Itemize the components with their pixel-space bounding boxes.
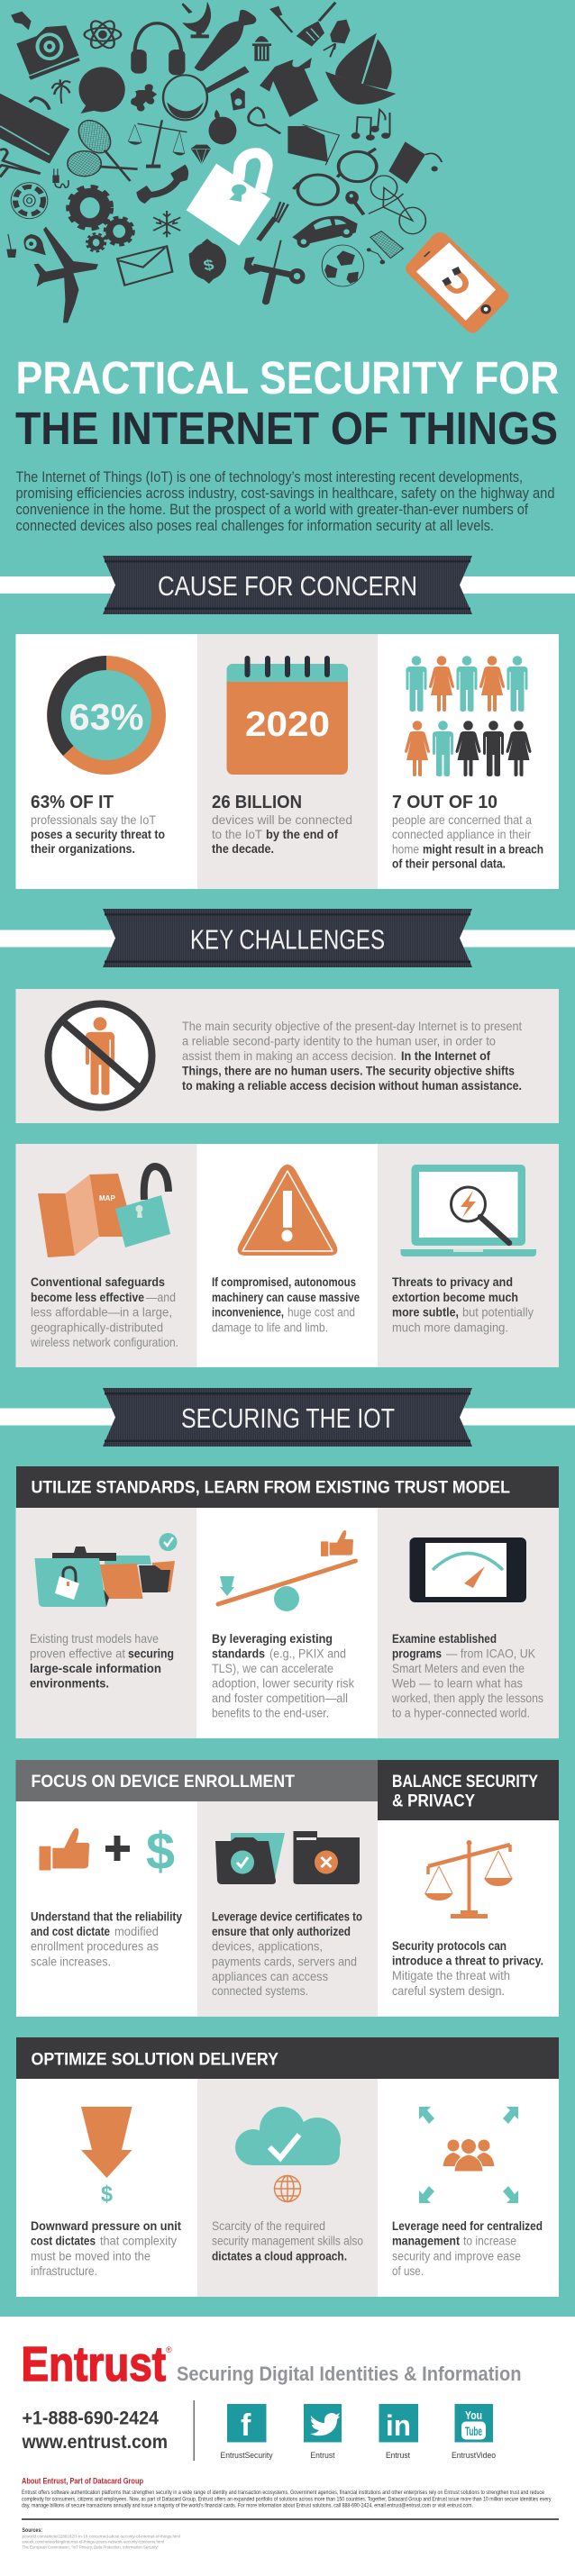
- text: autonomous machinery: machinery can cause massive: [212, 1290, 360, 1304]
- icon: speech bubble: [78, 67, 125, 113]
- text: threats to privacy: much more damaging.: [392, 1320, 508, 1335]
- icon: oil can: [388, 141, 442, 184]
- text: examine established programs: [391, 1631, 543, 1720]
- text: scarcity of skills: security management skills also: [212, 2234, 363, 2248]
- icon: shovel: [6, 234, 16, 258]
- icon: hanger: [0, 150, 41, 177]
- header: focus on device enrollment: [16, 1760, 378, 1801]
- panel: optimize solution delivery: [16, 2037, 559, 2297]
- text: conventional safeguards: become less effective: [31, 1290, 144, 1304]
- text: 7 out of 10: people are concerned that a: [392, 812, 532, 827]
- about text block: day, manage billions of secure transactions annually and issue a majority of the world’s financial cards. For more information about Entrust solutions, call 888-690-2424, email entrust@entrust.com or visit entrust.com.: [22, 2502, 473, 2509]
- text: existing trust models: securing: [128, 1646, 174, 1661]
- icon: seesaw with thumb up: [218, 1530, 355, 1611]
- text: conventional safeguards: [30, 1274, 178, 1349]
- icon: satellite dish: [181, 2, 211, 38]
- about text block: [22, 2477, 552, 2509]
- icon: calendar 2020: 2020: [245, 705, 330, 744]
- icon: no person sign: [49, 1003, 151, 1108]
- text: security objective: The main security objective of the present-day Internet is to present: [182, 1019, 522, 1033]
- header: balance security and privacy: [378, 1760, 559, 1820]
- icon: dress form: [324, 20, 351, 57]
- icon: apple: [209, 110, 236, 144]
- text: conventional safeguards: Conventional safeguards: [31, 1274, 165, 1289]
- icon: envelope: [117, 246, 172, 286]
- text: leveraging existing standards: benefits to the end-user.: [212, 1706, 329, 1720]
- social icon: Facebook: f: [241, 2408, 251, 2443]
- icon: white padlock: [187, 153, 270, 246]
- text: existing trust models: environments.: [30, 1675, 109, 1690]
- icon: camera: [16, 25, 80, 80]
- social icon: LinkedIn: Entrust: [386, 2451, 410, 2461]
- text: device certificates: devices, applications,: [212, 1938, 323, 1953]
- text: security objective: In the Internet of: [401, 1048, 490, 1063]
- social icon: Twitter: [304, 2404, 342, 2461]
- text: centralized management: Leverage need for centralized: [392, 2218, 543, 2233]
- text: 7 out of 10: of their personal data.: [392, 856, 506, 870]
- social icon: YouTube: Tube: [465, 2424, 482, 2438]
- icon: key: [345, 191, 364, 214]
- icon: t-shirt: [260, 58, 318, 117]
- section banner: cause for concern: CAUSE FOR CONCERN: [158, 570, 417, 602]
- text: security objective: a reliable second-party identity to the human user, in order to: [182, 1034, 496, 1048]
- icon: wrench and screwdriver: [244, 240, 306, 302]
- text: 63% of IT: poses a security threat to: [31, 827, 165, 841]
- icon: downward arrow and dollar: [81, 2107, 132, 2207]
- text: 7 out of 10: 7 OUT OF 10: [392, 793, 497, 812]
- text: scarcity of skills: Scarcity of the required: [212, 2218, 325, 2233]
- text: 26 billion: 26 BILLION: [212, 793, 302, 812]
- icon: piggy bank: [189, 239, 226, 284]
- text: centralized management: of use.: [392, 2263, 424, 2278]
- icon: scales: [128, 120, 187, 168]
- icon: downward arrow and dollar: $: [101, 2181, 113, 2207]
- text: autonomous machinery: [212, 1274, 360, 1335]
- contact details: +1-888-690-2424: [22, 2408, 159, 2428]
- text: 26 billion: the decade.: [212, 841, 274, 856]
- donut chart: 63%: 63%: [68, 696, 144, 738]
- icon: telephone handset: [136, 165, 188, 204]
- text: reliability and cost: enrollment procedures as: [31, 1938, 159, 1953]
- text: 26 billion: to the IoT: [212, 827, 262, 841]
- icon: thumb plus dollar: $: [146, 1822, 175, 1881]
- intro paragraph: connected devices also poses real challenges for information security at all levels.: [16, 517, 494, 534]
- icon: gears: [68, 186, 133, 251]
- social icon: YouTube: You: [465, 2408, 482, 2422]
- about text block: About Entrust, Part of Datacard Group: [22, 2477, 143, 2486]
- icon: atom: [85, 18, 121, 50]
- text: downward pressure: must be moved into the: [31, 2248, 151, 2263]
- section banner: securing the IoT: SECURING THE IOT: [181, 1402, 395, 1434]
- icon: music notes: [351, 110, 390, 141]
- icon: laptop with magnifier: [400, 1165, 536, 1256]
- text: conventional safeguards: —and: [146, 1290, 176, 1304]
- section banner: securing the IoT: [0, 1388, 575, 1447]
- icon: piggy bank: $: [202, 256, 216, 274]
- icon: milk carton: [231, 87, 245, 111]
- icon: sailboat: [325, 33, 396, 104]
- icon: calendar 2020: [227, 656, 348, 775]
- sources: Sources:: [22, 2527, 42, 2534]
- text: centralized management: management: [392, 2234, 460, 2248]
- panel: utilize standards: [16, 1466, 559, 1738]
- text: leveraging existing standards: (e.g., PKIX and: [269, 1646, 346, 1661]
- text: examine established programs: to a hyper-connected world.: [392, 1706, 530, 1720]
- icon: people row, 7 of 10: [405, 656, 532, 776]
- text: leveraging existing standards: standards: [212, 1646, 265, 1661]
- text: security objective: [182, 1019, 522, 1093]
- icon: soccer ball: [322, 245, 364, 286]
- text: security protocols: Mitigate the threat with: [392, 1968, 510, 1982]
- text: security protocols: [392, 1938, 543, 1998]
- icon: glasses: [293, 149, 377, 204]
- icon: folder: [288, 124, 339, 165]
- social icon: LinkedIn: in: [386, 2409, 411, 2442]
- text: threats to privacy: extortion become much: [392, 1290, 518, 1304]
- contact details: www.entrust.com: [22, 2432, 168, 2453]
- sources: eweek.com/networking/internet-of-things-poses-network-security-concerns.html: [22, 2540, 164, 2545]
- icon: thumb plus dollar: [40, 1822, 175, 1881]
- panel: no human users: [16, 989, 559, 1123]
- icon: game controller: [11, 12, 32, 30]
- text: existing trust models: proven effective at: [30, 1646, 125, 1661]
- text: existing trust models: Existing trust models have: [30, 1631, 159, 1646]
- text: conventional safeguards: less affordable—in a large,: [31, 1304, 172, 1319]
- icon: briefcase: [0, 93, 69, 164]
- text: threats to privacy: [392, 1274, 534, 1335]
- text: threats to privacy: Threats to privacy and: [392, 1274, 513, 1289]
- panel: device enrollment and balance: [16, 1760, 559, 2017]
- text: existing trust models: large-scale information: [30, 1661, 161, 1675]
- sources: [22, 2527, 180, 2551]
- icon: certificate folders: [215, 1831, 360, 1884]
- section header: UTILIZE STANDARDS, LEARN FROM EXISTING TRUST MODEL: [31, 1479, 510, 1497]
- icon: plug: [53, 168, 68, 187]
- text: downward pressure: cost dictates: [31, 2234, 96, 2248]
- section banner: key challenges: KEY CHALLENGES: [190, 924, 385, 955]
- contact details: [22, 2408, 168, 2453]
- text: conventional safeguards: geographically-distributed: [31, 1320, 163, 1335]
- social icon: Twitter: Entrust: [310, 2451, 335, 2461]
- icon: magnifier: [163, 66, 250, 120]
- text: device certificates: [212, 1909, 362, 1998]
- icon: orange smartphone with magnet: [406, 232, 509, 333]
- text: reliability and cost: and cost dictate: [31, 1924, 110, 1938]
- icon: car: [292, 216, 358, 248]
- icon: bicycle: [369, 176, 425, 234]
- icon: palm tree: [52, 79, 70, 104]
- text: security objective: assist them in making an access decision.: [182, 1048, 397, 1063]
- text: security protocols: Security protocols can: [392, 1938, 507, 1953]
- header: balance security and privacy: & PRIVACY: [392, 1792, 475, 1810]
- text: 26 billion: [212, 793, 352, 856]
- intro paragraph: [16, 468, 555, 534]
- social icon: YouTube: [452, 2404, 496, 2461]
- icon: spatula: [297, 3, 335, 47]
- icon: fork: [259, 202, 288, 240]
- text: examine established programs: Web — to learn what has: [392, 1675, 523, 1690]
- text: device certificates: payments cards, servers and: [212, 1955, 357, 1969]
- icon: cloud and globe: [235, 2107, 341, 2201]
- text: reliability and cost: modified: [114, 1924, 159, 1938]
- text: examine established programs: Examine established: [392, 1631, 497, 1646]
- icon: folders with lock and check: [34, 1533, 177, 1607]
- icon: warning triangle: [238, 1165, 337, 1256]
- text: 63% of IT: their organizations.: [31, 841, 135, 856]
- section header: OPTIMIZE SOLUTION DELIVERY: [31, 2050, 278, 2070]
- text: 26 billion: devices will be connected: [212, 812, 352, 827]
- social icon: LinkedIn: [379, 2404, 418, 2461]
- title: [15, 352, 559, 454]
- section header: [16, 2037, 559, 2079]
- text: 26 billion: by the end of: [266, 827, 338, 841]
- icon: diamond: [191, 145, 211, 165]
- text: examine established programs: worked, then apply the lessons: [391, 1691, 543, 1705]
- icon: tennis rackets: [68, 116, 138, 181]
- text: downward pressure: that complexity: [100, 2234, 177, 2248]
- icon: axe: [269, 6, 292, 32]
- text: examine established programs: Smart Meters and even the: [392, 1661, 525, 1675]
- logo: Entrust: Entrust: [22, 2337, 166, 2391]
- icon: bottle: [195, 10, 256, 71]
- text: device certificates: Leverage device certificates to: [212, 1909, 362, 1924]
- icon: puzzle piece: [131, 84, 157, 111]
- text: leveraging existing standards: adoption, lower security risk: [212, 1675, 355, 1690]
- panel: challenges row: [16, 1144, 559, 1367]
- section header: [16, 1466, 559, 1508]
- icon: balance scale: [424, 1840, 513, 1918]
- social icon: Facebook: EntrustSecurity: [220, 2451, 273, 2461]
- text: security objective: Things, there are no human users. The security objective shifts: [182, 1063, 515, 1077]
- text: 7 out of 10: home: [392, 841, 419, 856]
- header: focus on device enrollment: FOCUS ON DEVICE ENROLLMENT: [31, 1773, 295, 1791]
- text: scarcity of skills: [212, 2218, 363, 2263]
- text: security protocols: introduce a threat to privacy.: [392, 1953, 543, 1967]
- social icon: Facebook: [220, 2404, 273, 2461]
- text: reliability and cost: Understand that the reliability: [31, 1909, 182, 1924]
- hero icon cloud: [0, 2, 509, 333]
- text: reliability and cost: [31, 1909, 182, 1969]
- text: examine established programs: programs: [392, 1646, 442, 1661]
- text: device certificates: ensure that only authorized: [212, 1924, 351, 1938]
- text: device certificates: connected systems.: [212, 1983, 308, 1998]
- sources: pcworld.com/article/2288182/7-in-10-concerned-about-security-of-internet-of-things.html: [22, 2535, 180, 2540]
- icon: map pin: [23, 234, 46, 255]
- text: reliability and cost: scale increases.: [31, 1955, 111, 1969]
- header: balance security and privacy: BALANCE SECURITY: [392, 1773, 538, 1791]
- icon: map and open padlock: [38, 1166, 170, 1257]
- text: leveraging existing standards: TLS), we can accelerate: [212, 1661, 333, 1675]
- icon: compact disc: [11, 183, 48, 219]
- social icon: YouTube: EntrustVideo: [452, 2451, 496, 2461]
- panel: cause for concern: [16, 634, 559, 889]
- text: autonomous machinery: huge cost and: [288, 1304, 355, 1319]
- text: autonomous machinery: inconvenience,: [212, 1304, 284, 1319]
- logo: Entrust: ®: [166, 2345, 172, 2354]
- text: centralized management: security and improve ease: [392, 2248, 521, 2263]
- icon: shopping cart: [367, 231, 404, 264]
- text: 63% of IT: professionals say the IoT: [31, 812, 156, 827]
- icon: centralized people with arrows: [419, 2107, 518, 2203]
- text: downward pressure: Downward pressure on unit: [31, 2218, 181, 2233]
- text: 63% of IT: 63% OF IT: [31, 793, 114, 812]
- text: 63% of IT: [31, 793, 165, 856]
- text: centralized management: to increase: [463, 2234, 516, 2248]
- text: leveraging existing standards: and foster competition—all: [212, 1691, 348, 1705]
- icon: map and open padlock: MAP: [99, 1194, 115, 1202]
- sources: The European Commission, “IoT Privacy, Data Protection, Information Security”: [22, 2545, 159, 2551]
- icon: airplane: [33, 227, 98, 322]
- text: security objective: to making a reliable access decision without human assistance.: [182, 1078, 522, 1093]
- icon: stethoscope: [249, 107, 280, 133]
- text: downward pressure: [31, 2218, 181, 2278]
- text: autonomous machinery: damage to life and limb.: [212, 1320, 328, 1335]
- text: 7 out of 10: might result in a breach: [423, 841, 543, 856]
- icon: snowflake: [153, 211, 180, 237]
- tagline: Securing Digital Identities & Information: [177, 2363, 521, 2385]
- text: security protocols: careful system design.: [392, 1983, 505, 1998]
- icon: headphones: [131, 23, 185, 75]
- text: leveraging existing standards: [212, 1631, 355, 1720]
- section banner: cause for concern: [0, 556, 575, 614]
- text: threats to privacy: more subtle,: [392, 1304, 459, 1319]
- text: existing trust models: [30, 1631, 174, 1690]
- text: 7 out of 10: connected appliance in their: [392, 827, 531, 841]
- text: examine established programs: — from ICAO, UK: [446, 1646, 536, 1661]
- text: scarcity of skills: dictates a cloud approach.: [212, 2248, 347, 2263]
- icon: tablet gauge: [409, 1537, 526, 1602]
- text: centralized management: [392, 2218, 543, 2278]
- section banner: key challenges: [0, 909, 575, 967]
- text: conventional safeguards: wireless network configuration.: [30, 1335, 178, 1349]
- text: autonomous machinery: If compromised, autonomous: [212, 1274, 356, 1289]
- icon: hydrant: [252, 36, 271, 61]
- text: leveraging existing standards: By leveraging existing: [212, 1631, 333, 1646]
- text: 7 out of 10: [392, 793, 543, 870]
- footer: white background: [0, 2317, 575, 2576]
- text: device certificates: appliances can access: [212, 1969, 328, 1983]
- donut chart: 63%: [47, 656, 166, 775]
- text: downward pressure: infrastructure.: [31, 2263, 97, 2278]
- text: threats to privacy: but potentially: [462, 1304, 534, 1319]
